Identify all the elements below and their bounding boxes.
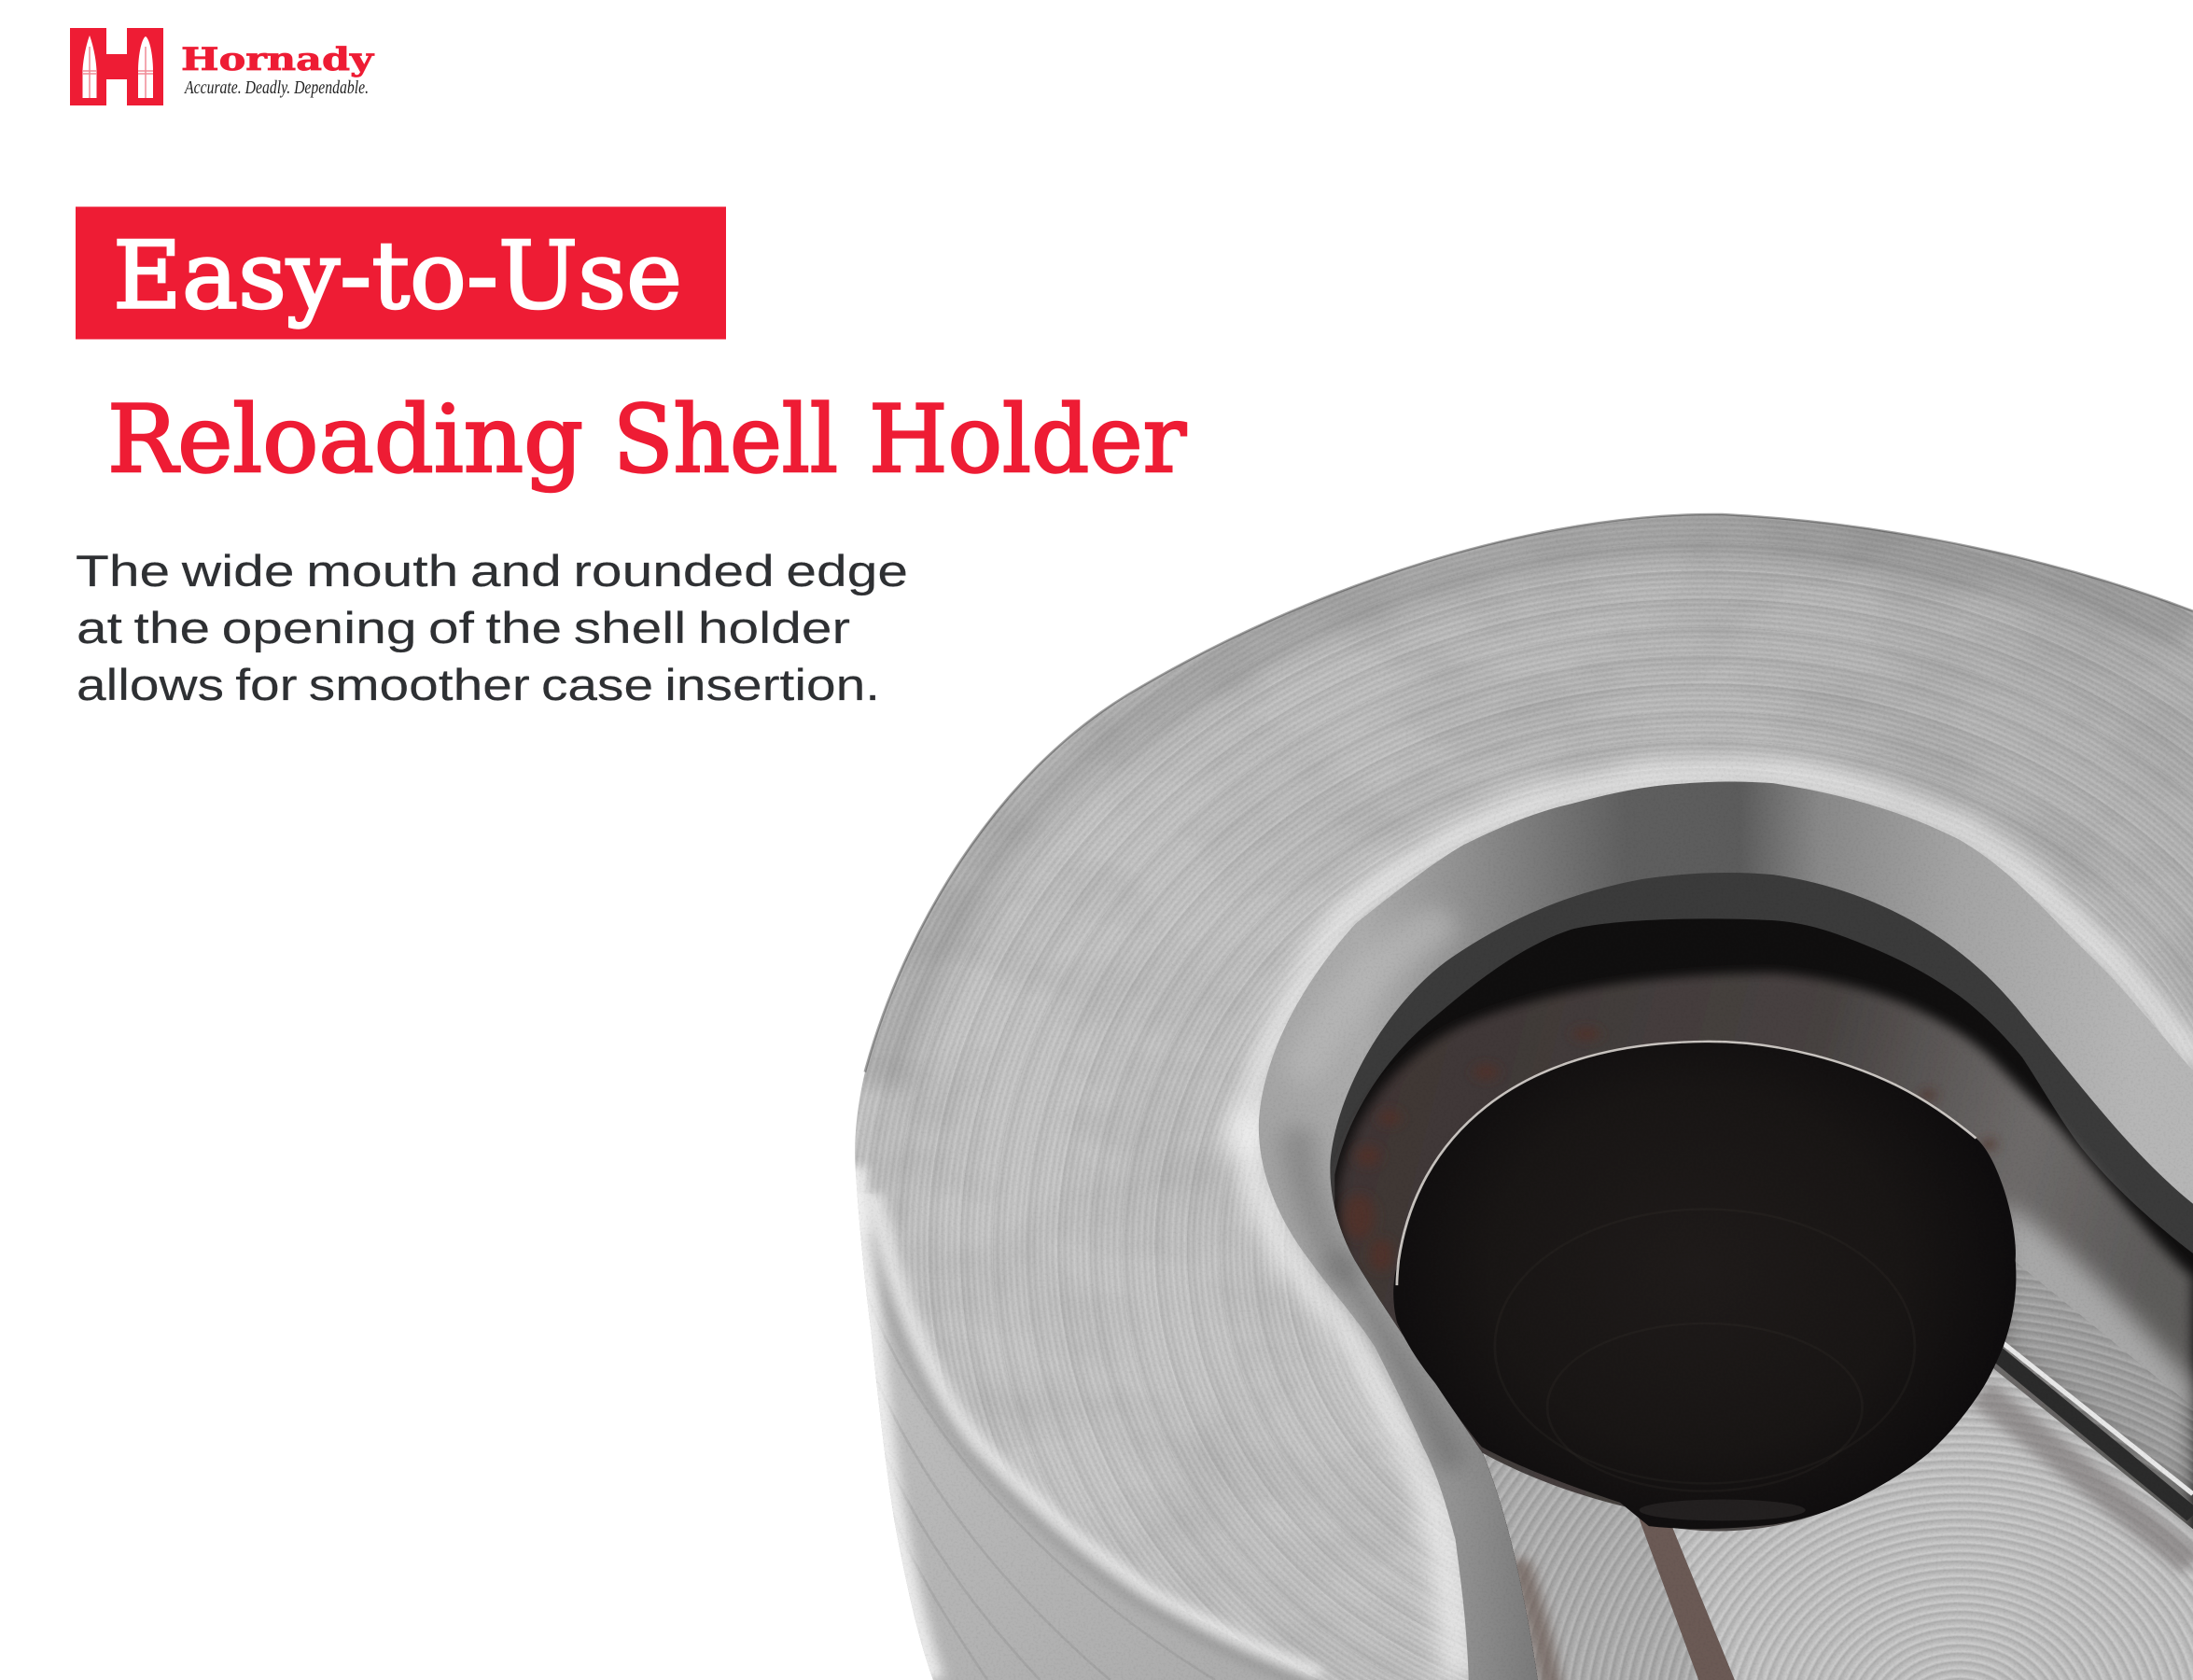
chamfered mouth bevel [1259,781,2193,1680]
groove [1997,1354,2193,1516]
heading banner: Easy-to-Use: Easy-to-Use [113,222,682,330]
light scratched chamfer patch [1306,927,1433,1064]
body text: The wide mouth and rounded edge [76,547,908,596]
heading: Reloading Shell Holder: Holder [869,386,1187,494]
recess interior [1330,873,2193,1680]
lower wedge [1483,1453,1698,1680]
tongue highlight [2004,1343,2193,1494]
lower flat surface [1672,1362,2193,1680]
wedge rust edge [1521,1567,1552,1680]
body text: at the opening of the shell holder [77,604,850,653]
inner lip [1330,873,2193,1678]
dark shading along upper edge [883,533,2193,1087]
logo tagline: Accurate. Deadly. Dependable. [183,77,369,98]
top face of shell holder [821,485,2193,1680]
lower right tongue [2003,1201,2193,1500]
pale lower-left edge [856,1167,933,1680]
recess floor [1337,973,2193,1680]
logo wordmark: Hornady [181,41,375,78]
body text [76,547,908,710]
logo: Hornady [70,28,375,105]
metal grain [821,485,2193,1680]
rust strip [1636,1509,1735,1680]
heading banner: Easy-to-Use [76,207,726,340]
side wall [847,1194,1320,1680]
body text: allows for smoother case insertion. [77,661,880,710]
highlight rim around mouth [1249,772,2193,1155]
darker shading on hook band [1337,1263,1451,1461]
heading: Reloading Shell Holder: Shell [613,386,838,494]
heading: Reloading Shell Holder [107,386,1187,494]
photo: steel shell holder [821,485,2193,1680]
icon: H mark with bullets [70,28,163,105]
shadow beside groove [1980,1392,2193,1563]
central hole [1393,1042,2016,1529]
heading: Reloading Shell Holder: Reloading [107,386,583,494]
outer edge line [865,514,2193,1072]
black shadow zone [1334,918,2193,1680]
rust marks [1344,1028,1995,1271]
